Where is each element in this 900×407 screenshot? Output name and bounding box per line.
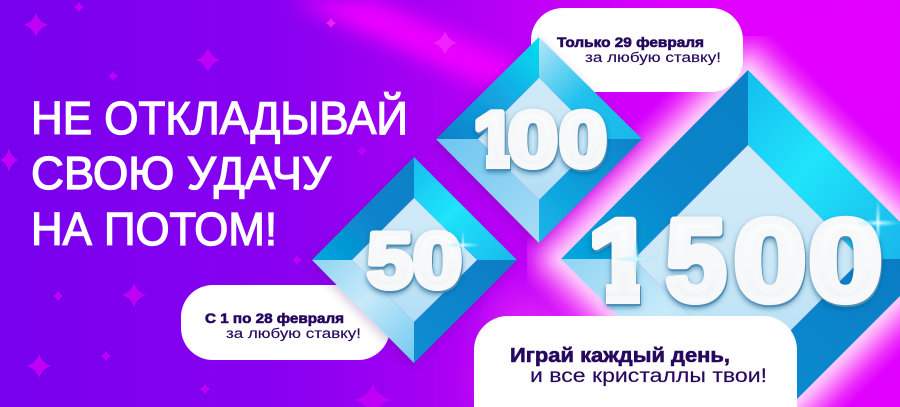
bubble: only 29 February (531, 8, 743, 92)
number: 50: 5 (367, 216, 413, 304)
number: 50 (367, 216, 462, 304)
bubble: only 29 February: за любую ставку! (585, 50, 721, 65)
number: 100: 0 (559, 95, 607, 183)
number: 100: 1 (473, 95, 516, 183)
bubble: only 29 February: Только 29 февраля (557, 35, 704, 50)
bubble: play every day (474, 316, 797, 407)
sparkles (0, 2, 457, 407)
number: 1 500: 0 (734, 197, 806, 325)
sparkle glints (445, 197, 900, 279)
bubble: 1 to 28 February (181, 285, 390, 360)
heading: НА ПОТОМ! (31, 203, 277, 255)
number: 100 (472, 108, 610, 177)
bubble: play every day: Играй каждый день, (510, 345, 730, 367)
number: 1 500: 0 (809, 197, 882, 325)
crystal: 50 (312, 157, 517, 363)
number: 1 500 (589, 214, 884, 312)
number: 1 500: 5 (666, 197, 726, 325)
number: 1 500: 1 (588, 197, 654, 325)
heading: НЕ ОТКЛАДЫВАЙ (31, 92, 408, 144)
crystal: 100 (436, 37, 642, 243)
bubble: 1 to 28 February: С 1 по 28 февраля (205, 311, 344, 326)
crystal: 1500 (561, 70, 900, 407)
number: 50: 0 (413, 216, 462, 304)
bubble: 1 to 28 February: за любую ставку! (226, 326, 361, 341)
heading (31, 92, 408, 255)
heading: СВОЮ УДАЧУ (31, 147, 332, 199)
bubble: play every day: и все кристаллы твои! (530, 366, 767, 387)
background light streaks and glow (290, 0, 900, 407)
number: 100: 0 (508, 95, 558, 183)
